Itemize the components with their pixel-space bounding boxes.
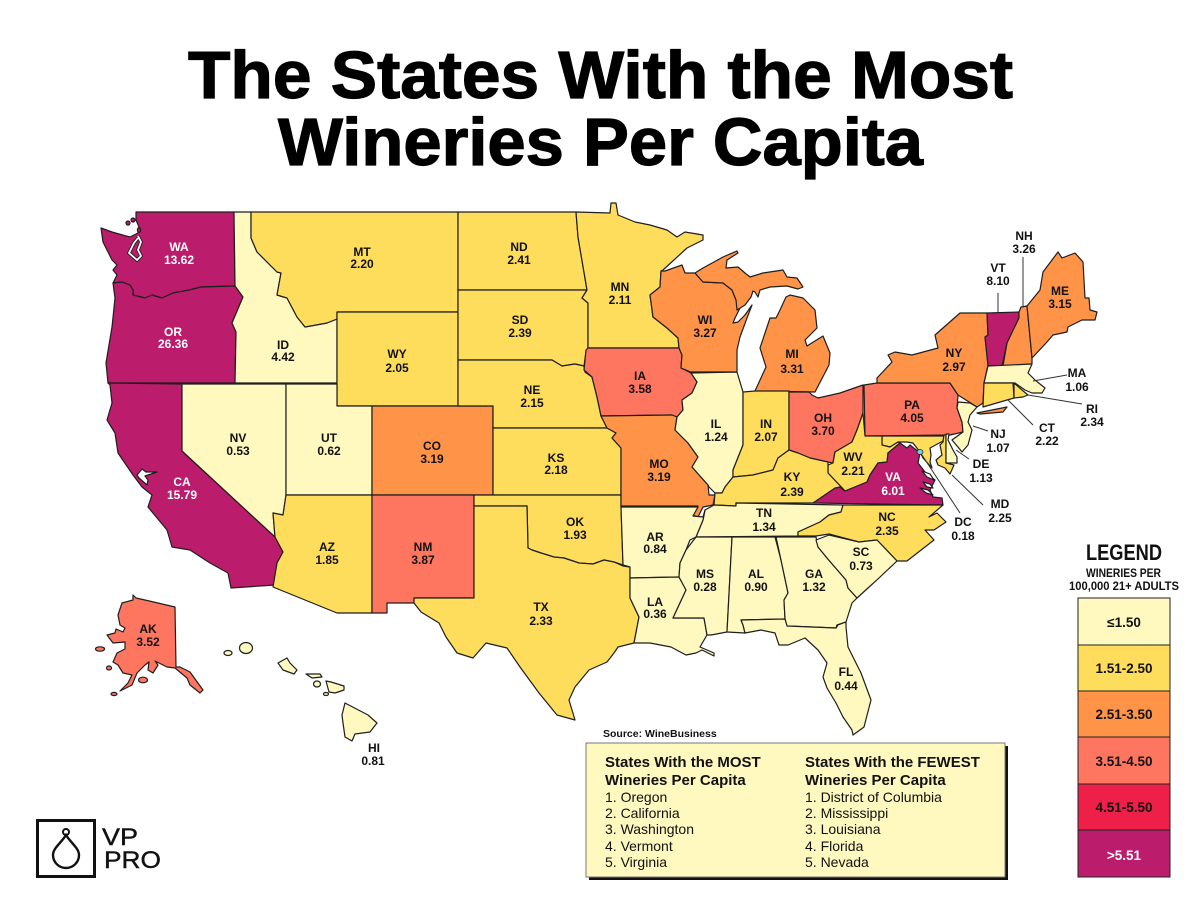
state: Utah <box>286 384 372 495</box>
state: North Dakota: ND <box>510 240 528 254</box>
state: Michigan: 3.31 <box>780 362 804 376</box>
state: Washington: WA <box>169 240 189 254</box>
label: New Hampshire <box>1012 229 1036 306</box>
state: Georgia: GA <box>805 567 823 581</box>
state: Nevada: NV <box>230 431 246 445</box>
state: Alabama: 0.90 <box>744 580 768 594</box>
state: Nebraska <box>458 360 607 428</box>
state: Iowa <box>584 348 697 417</box>
state: Washington: 13.62 <box>164 253 194 267</box>
label: Rhode Island: RI <box>1086 402 1098 416</box>
state: New Mexico: 3.87 <box>411 553 435 567</box>
legend: 3.51-4.50 <box>1095 754 1153 769</box>
state: Indiana: 2.07 <box>754 430 778 444</box>
state: Wisconsin: WI <box>698 313 712 327</box>
state: Florida: FL <box>839 665 853 679</box>
state: Virginia <box>813 443 943 505</box>
state: Washington <box>101 212 235 298</box>
state: Nevada: 0.53 <box>226 444 250 458</box>
label: Vermont: 8.10 <box>986 274 1010 288</box>
label: Rhode Island: 2.34 <box>1080 415 1104 429</box>
state: California: 15.79 <box>167 488 197 502</box>
state: Idaho: 4.42 <box>271 350 295 364</box>
state: Wisconsin <box>650 265 752 372</box>
state: Minnesota <box>576 203 703 348</box>
state: Iowa: IA <box>634 369 646 383</box>
list: states with the most wineries: 1. Oregon <box>605 789 667 805</box>
logo: VP Pro <box>38 820 161 876</box>
legend: 2.51-3.50 <box>1095 707 1153 722</box>
state: North Dakota: 2.41 <box>507 253 531 267</box>
state: North Carolina <box>798 505 946 561</box>
source note: Source: WineBusiness <box>603 728 717 740</box>
label: Delaware: DE <box>973 457 989 471</box>
label: New Jersey <box>973 426 1010 455</box>
state: Illinois: IL <box>711 417 721 431</box>
list: states with the fewest wineries: 4. Florida <box>805 838 864 854</box>
legend: 1.51-2.50 <box>1095 661 1153 676</box>
state: South Dakota <box>458 290 588 366</box>
state: Arizona: 1.85 <box>315 553 339 567</box>
state: Texas <box>414 506 639 720</box>
map of the United States <box>96 203 1104 768</box>
state: Wisconsin: 3.27 <box>693 326 717 340</box>
legend: ≤1.50 <box>1107 615 1141 630</box>
state: Indiana: IN <box>760 417 772 431</box>
label: Connecticut <box>1008 400 1059 448</box>
list: states with the fewest wineries: Wineries Per Capita <box>805 772 946 789</box>
state: New Jersey <box>952 402 977 452</box>
label: New Hampshire: NH <box>1015 229 1033 243</box>
state: Maine: ME <box>1051 284 1069 298</box>
state: Kentucky: KY <box>784 470 800 484</box>
label: Massachusetts <box>1033 366 1089 394</box>
state: Texas: TX <box>533 600 549 614</box>
state: New York: 2.97 <box>942 360 966 374</box>
legend <box>1069 540 1179 877</box>
state: South Carolina: 0.73 <box>849 559 873 573</box>
state: Illinois: 1.24 <box>704 430 728 444</box>
state: Mississippi: 0.28 <box>693 580 717 594</box>
list: states with the fewest wineries: States With the FEWEST <box>805 754 980 771</box>
state: Texas: 2.33 <box>529 614 553 628</box>
state: Mississippi: MS <box>696 567 714 581</box>
state: Ohio: 3.70 <box>811 424 835 438</box>
title: Wineries Per Capita <box>278 105 924 180</box>
state: Tennessee <box>696 503 843 537</box>
state: South Dakota: SD <box>512 313 529 327</box>
label: New Jersey: 1.07 <box>986 441 1010 455</box>
label: Delaware: 1.13 <box>969 471 993 485</box>
state: New Mexico <box>372 495 474 613</box>
state: South Dakota: 2.39 <box>508 326 532 340</box>
label: Rhode Island <box>1028 395 1104 429</box>
label: Delaware <box>956 450 993 485</box>
state: North Carolina: NC <box>878 510 896 524</box>
state: Oklahoma: OK <box>566 515 584 529</box>
state: North Dakota <box>458 212 587 290</box>
state: Alaska: AK <box>139 622 157 636</box>
state: Michigan <box>695 251 830 392</box>
label: New Hampshire: 3.26 <box>1012 242 1036 256</box>
label: Maryland <box>952 475 1012 525</box>
list: states with the fewest wineries: 2. Mississippi <box>805 805 888 821</box>
state: Idaho: ID <box>277 338 289 352</box>
label: Maryland: MD <box>991 497 1010 511</box>
state: Pennsylvania: PA <box>904 398 920 412</box>
logo: VP Pro: VP <box>102 824 138 851</box>
label: District of Columbia: 0.18 <box>951 529 975 543</box>
state: Nevada <box>182 384 286 537</box>
state: Montana: MT <box>353 245 371 259</box>
state: Louisiana: 0.36 <box>643 607 667 621</box>
state: Florida: 0.44 <box>834 679 858 693</box>
state: North Carolina: 2.35 <box>875 524 899 538</box>
state: Alabama: AL <box>748 567 764 581</box>
state: Maryland <box>882 435 954 474</box>
state: South Carolina <box>816 535 897 598</box>
list: states with the most wineries: 5. Virginia <box>605 854 667 870</box>
state: Oklahoma: 1.93 <box>563 528 587 542</box>
state: New York: NY <box>946 346 962 360</box>
label: Massachusetts: 1.06 <box>1065 380 1089 394</box>
state: Arkansas <box>621 507 705 578</box>
state: Alabama <box>727 537 788 633</box>
legend: LEGEND <box>1086 540 1162 565</box>
state: Delaware <box>946 434 957 463</box>
panel: top and bottom ranked states <box>586 743 1008 880</box>
state: New Hampshire <box>1003 306 1032 366</box>
state: Wyoming <box>337 312 458 406</box>
label: District of Columbia: DC <box>954 515 972 529</box>
list: states with the most wineries: States With the MOST <box>605 754 761 771</box>
state: Hawaii: 0.81 <box>361 754 385 768</box>
state: Georgia <box>776 537 857 628</box>
state: South Carolina: SC <box>853 545 870 559</box>
state: Colorado: CO <box>423 439 441 453</box>
logo: VP Pro: PRO <box>104 847 161 874</box>
state: Minnesota: MN <box>611 280 629 294</box>
state: Louisiana <box>630 577 714 656</box>
state: Connecticut <box>983 383 1014 407</box>
state: Georgia: 1.32 <box>802 580 826 594</box>
state: Kentucky <box>714 450 845 506</box>
state: Missouri: 3.19 <box>647 470 671 484</box>
state: Arkansas: 0.84 <box>643 542 667 556</box>
legend: WINERIES PER <box>1086 568 1162 580</box>
state: Alaska: 3.52 <box>136 635 160 649</box>
list: states with the most wineries: 4. Vermont <box>605 838 673 854</box>
state: California: CA <box>173 475 191 489</box>
label: Vermont: VT <box>990 261 1006 275</box>
state: West Virginia: 2.21 <box>841 464 865 478</box>
label: District of Columbia <box>917 450 975 543</box>
list: states with the fewest wineries: 5. Nevada <box>805 854 869 870</box>
legend: >5.51 <box>1107 848 1142 863</box>
state: Oregon <box>106 282 243 383</box>
state: Wyoming: 2.05 <box>385 361 409 375</box>
state: Nebraska: 2.15 <box>520 396 544 410</box>
state: Montana <box>251 212 458 327</box>
label: Maryland: 2.25 <box>988 511 1012 525</box>
list: states with the fewest wineries: 3. Louisiana <box>805 821 881 837</box>
label: Connecticut: CT <box>1039 421 1056 435</box>
state: Nebraska: NE <box>524 383 540 397</box>
state: Colorado <box>372 406 493 495</box>
state: Mississippi <box>673 537 732 635</box>
state: Oregon: 26.36 <box>158 337 188 351</box>
label: Massachusetts: MA <box>1068 366 1087 380</box>
state: Maine <box>1027 252 1097 358</box>
state: Vermont <box>985 312 1019 366</box>
state: Kansas <box>493 428 621 495</box>
state: Maine: 3.15 <box>1048 297 1072 311</box>
state: California <box>107 383 283 588</box>
state: New Mexico: NM <box>414 540 432 554</box>
state: Hawaii: HI <box>368 741 380 755</box>
label: New Jersey: NJ <box>990 427 1006 441</box>
state: Hawaii <box>224 642 385 768</box>
state: Massachusetts <box>984 364 1045 393</box>
state: Wyoming: WY <box>387 347 407 361</box>
state: New York <box>877 313 1007 414</box>
state: West Virginia: WV <box>843 450 863 464</box>
list: states with the most wineries <box>605 754 761 870</box>
state: Louisiana: LA <box>647 595 663 609</box>
state: Rhode Island <box>1014 383 1028 398</box>
state: Florida <box>741 619 871 735</box>
state: Virginia: 6.01 <box>881 484 905 498</box>
label: Vermont <box>986 261 1010 312</box>
state: Arizona <box>273 495 372 613</box>
state: West Virginia <box>828 413 900 491</box>
state: Arkansas: AR <box>646 530 664 544</box>
state: Colorado: 3.19 <box>420 452 444 466</box>
state: Alaska <box>96 595 203 696</box>
list: states with the most wineries: 3. Washington <box>605 821 694 837</box>
label: Connecticut: 2.22 <box>1035 434 1059 448</box>
state: Kansas: 2.18 <box>544 463 568 477</box>
state: Oregon: OR <box>164 325 182 339</box>
state: Kansas: KS <box>548 451 564 465</box>
state: Missouri <box>601 415 715 517</box>
list: states with the most wineries: Wineries Per Capita <box>605 772 746 789</box>
state: Iowa: 3.58 <box>628 382 652 396</box>
state: Kentucky: 2.39 <box>780 485 804 499</box>
state: Utah: UT <box>321 431 338 445</box>
state: Ohio <box>789 385 863 463</box>
list: states with the fewest wineries <box>805 754 980 870</box>
state: Oklahoma <box>474 495 623 565</box>
state: Missouri: MO <box>649 457 669 471</box>
state: Idaho <box>232 212 337 383</box>
state: Tennessee: 1.34 <box>752 520 776 534</box>
state: Arizona: AZ <box>319 540 335 554</box>
legend: 100,000 21+ ADULTS <box>1069 581 1179 593</box>
state: Utah: 0.62 <box>317 444 341 458</box>
state: Pennsylvania: 4.05 <box>900 411 924 425</box>
state: Ohio: OH <box>814 411 832 425</box>
state: Illinois <box>675 372 743 493</box>
state: Tennessee: TN <box>756 506 772 520</box>
legend: 4.51-5.50 <box>1095 800 1153 815</box>
state: Michigan: MI <box>785 347 799 361</box>
state: Pennsylvania <box>864 383 963 436</box>
title: The States With the Most <box>188 38 1013 113</box>
state: Minnesota: 2.11 <box>609 293 632 307</box>
state: Montana: 2.20 <box>350 257 374 271</box>
list: states with the fewest wineries: 1. District of Columbia <box>805 789 942 805</box>
title <box>188 38 1013 180</box>
state: Indiana <box>733 391 789 477</box>
list: states with the most wineries: 2. California <box>605 805 680 821</box>
state: Virginia: VA <box>885 470 901 484</box>
